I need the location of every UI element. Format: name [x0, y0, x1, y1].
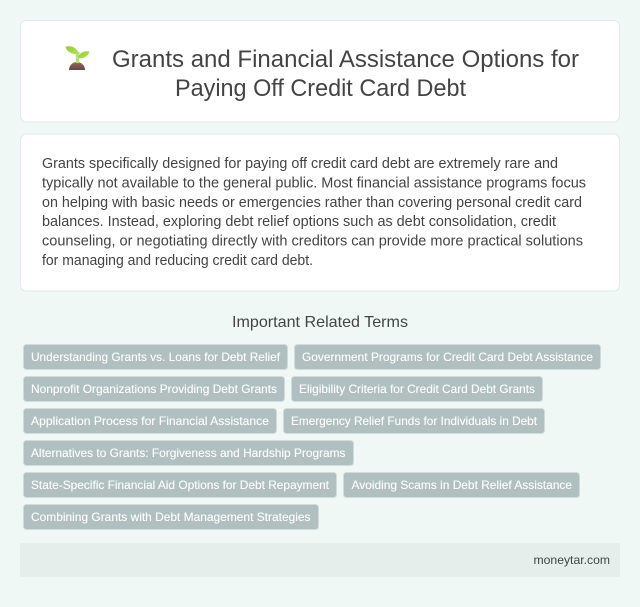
paragraph text: counseling, or negotiating directly with creditors can provide more practical solutions	[42, 234, 583, 250]
tag: eligibility criteria: Eligibility Criteria for Credit Card Debt Grants	[299, 382, 535, 396]
paragraph text: balances. Instead, exploring debt relief options such as debt consolidation, credit	[42, 214, 556, 230]
title text: Grants and Financial Assistance Options for	[112, 46, 579, 73]
tag: state-specific aid: State-Specific Financial Aid Options for Debt Repayment	[31, 478, 330, 492]
tag: emergency relief funds: Emergency Relief Funds for Individuals in Debt	[291, 414, 538, 428]
title text	[112, 46, 579, 102]
tag: alternatives to grants	[24, 440, 354, 466]
tag: alternatives to grants: Alternatives to Grants: Forgiveness and Hardship Programs	[31, 446, 346, 460]
tag: application process: Application Process for Financial Assistance	[31, 414, 269, 428]
tag: state-specific aid	[24, 472, 336, 498]
tag: government programs: Government Programs for Credit Card Debt Assistance	[302, 350, 593, 364]
tag: nonprofit organizations: Nonprofit Organizations Providing Debt Grants	[31, 382, 277, 396]
tag: understanding grants vs loans	[24, 344, 288, 370]
paragraph text: Grants specifically designed for paying off credit card debt are extremely rare and	[42, 156, 558, 172]
title text: Paying Off Credit Card Debt	[175, 75, 466, 102]
tag: understanding grants vs loans: Understanding Grants vs. Loans for Debt Relief	[31, 350, 281, 364]
tag: avoiding scams	[344, 472, 580, 498]
tag: emergency relief funds	[284, 408, 544, 434]
paragraph text: on helping with basic needs or emergencies rather than covering personal credit card	[42, 195, 582, 211]
panel: summary paragraph	[20, 134, 620, 291]
paragraph text	[42, 156, 586, 269]
tag: government programs	[294, 344, 600, 370]
footer source text: moneytar.com	[534, 553, 610, 567]
tag: combining grants	[24, 504, 318, 530]
panel: title header	[20, 20, 620, 122]
tag list	[24, 344, 600, 530]
icon: seedling	[66, 46, 90, 70]
tag: combining grants: Combining Grants with Debt Management Strategies	[31, 510, 310, 524]
paragraph text: for managing and reducing credit card debt.	[42, 253, 313, 269]
footer bar	[20, 543, 620, 577]
tag: avoiding scams: Avoiding Scams in Debt Relief Assistance	[352, 478, 572, 492]
paragraph text: typically not available to the general public. Most financial assistance programs focus	[42, 175, 586, 191]
tag: nonprofit organizations	[24, 376, 284, 402]
tag: eligibility criteria	[292, 376, 542, 402]
tag: application process	[24, 408, 276, 434]
heading: important related terms: Important Related Terms	[232, 314, 408, 331]
